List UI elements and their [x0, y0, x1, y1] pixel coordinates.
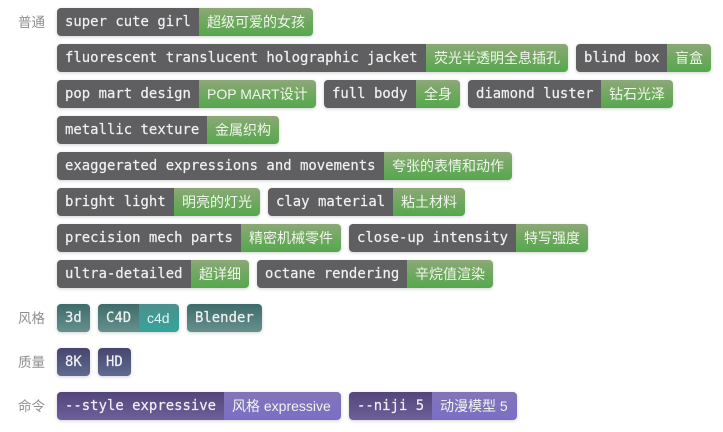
tag: fluorescent translucent holographic jacket: fluorescent translucent holographic jacket	[65, 50, 418, 66]
tag: close-up intensity: close-up intensity	[357, 230, 508, 246]
tag: full body: full body	[332, 86, 408, 102]
tag: full body	[324, 80, 460, 108]
label: 命令: 命令	[18, 399, 45, 414]
tag: --niji 5	[349, 392, 517, 420]
tag: ultra-detailed: ultra-detailed	[65, 266, 183, 282]
label: 质量: 质量	[18, 355, 45, 370]
tag: C4D: c4d	[147, 310, 170, 326]
tag: bright light: bright light	[65, 194, 166, 210]
tag: blind box: blind box	[584, 50, 660, 66]
tag: full body: 全身	[424, 86, 452, 102]
tag: metallic texture: 金属织构	[215, 122, 271, 138]
tag: bright light	[57, 188, 260, 216]
tag: clay material	[268, 188, 465, 216]
tag: super cute girl	[57, 8, 313, 36]
tag: --style expressive: 风格 expressive	[232, 398, 331, 414]
label: 风格: 风格	[18, 311, 45, 326]
tag: exaggerated expressions and movements: exaggerated expressions and movements	[65, 158, 376, 174]
tag: super cute girl: super cute girl	[65, 14, 191, 30]
tag: --style expressive: --style expressive	[65, 398, 216, 414]
tag: ultra-detailed	[57, 260, 249, 288]
tag: clay material: 粘土材料	[401, 194, 457, 210]
tag: pop mart design: pop mart design	[65, 86, 191, 102]
tag: --style expressive	[57, 392, 341, 420]
tag: super cute girl: 超级可爱的女孩	[207, 14, 305, 30]
tag: diamond luster	[468, 80, 673, 108]
tag: bright light: 明亮的灯光	[182, 194, 252, 210]
tag: close-up intensity	[349, 224, 588, 252]
tag: 3d	[57, 304, 90, 332]
tag: Blender: Blender	[195, 310, 254, 326]
tag: --niji 5: 动漫模型 5	[440, 398, 508, 414]
tag: fluorescent translucent holographic jacket	[57, 44, 568, 72]
tag: 3d: 3d	[65, 310, 82, 326]
tag: precision mech parts: precision mech parts	[65, 230, 233, 246]
tag: precision mech parts: 精密机械零件	[249, 230, 333, 246]
tag: blind box: 盲盒	[675, 50, 703, 66]
tag: pop mart design	[57, 80, 316, 108]
tag: metallic texture	[57, 116, 279, 144]
tag: precision mech parts	[57, 224, 341, 252]
tag: exaggerated expressions and movements	[57, 152, 512, 180]
tag: HD	[98, 348, 131, 376]
tag: C4D	[98, 304, 179, 332]
tag: clay material: clay material	[276, 194, 385, 210]
tag: close-up intensity: 特写强度	[524, 230, 580, 246]
tag: HD: HD	[106, 354, 123, 370]
tag: Blender	[187, 304, 262, 332]
label: 普通: 普通	[18, 15, 45, 30]
tag: C4D: C4D	[106, 310, 131, 326]
tag: ultra-detailed: 超详细	[199, 266, 241, 282]
tag: diamond luster: diamond luster	[476, 86, 594, 102]
tag: 8K: 8K	[65, 354, 82, 370]
tag: diamond luster: 钻石光泽	[609, 86, 665, 102]
tag: --niji 5: --niji 5	[357, 398, 424, 414]
tag: octane rendering: 辛烷值渲染	[415, 266, 485, 282]
tag: fluorescent translucent holographic jacket: 荧光半透明全息插孔	[434, 50, 560, 66]
tag: 8K	[57, 348, 90, 376]
tag: pop mart design: POP MART设计	[207, 86, 308, 102]
tag: exaggerated expressions and movements: 夸张的表情和动作	[392, 158, 504, 174]
tag: metallic texture: metallic texture	[65, 122, 199, 138]
tag: blind box	[576, 44, 711, 72]
tag: octane rendering	[257, 260, 493, 288]
tag: octane rendering: octane rendering	[265, 266, 399, 282]
